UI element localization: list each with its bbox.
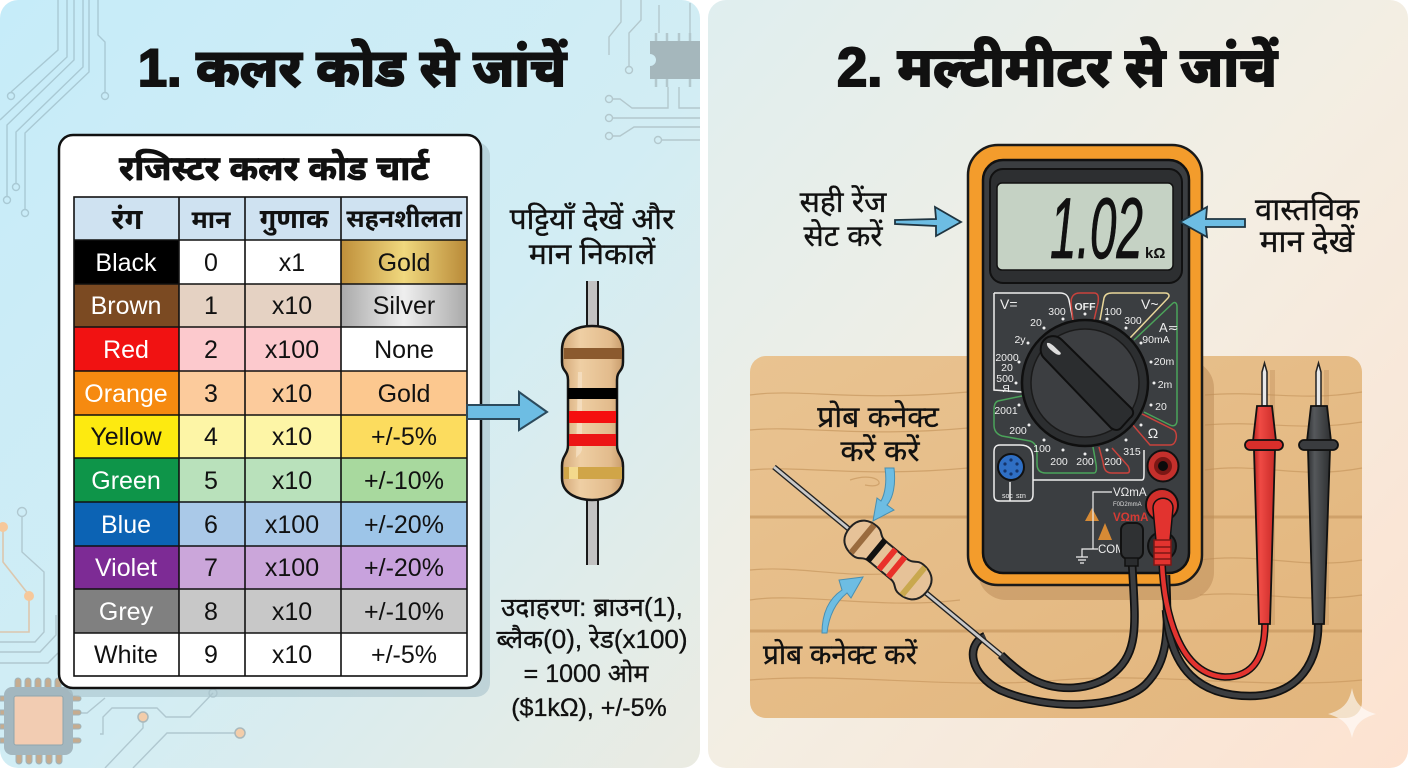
- dial labels: 2000: [995, 352, 1019, 364]
- probe lead: right black: [1166, 610, 1318, 696]
- table text: x100: [265, 336, 319, 364]
- table text: x100: [265, 554, 319, 582]
- dial labels: [994, 296, 1179, 556]
- chart heading: रजिस्टर कलर कोड चार्ट: [119, 148, 430, 188]
- rotary knob: [1022, 320, 1148, 446]
- dial labels: 100: [1104, 306, 1122, 318]
- table text: White: [94, 641, 158, 669]
- arrow: range: [895, 207, 961, 236]
- color code table: [74, 197, 467, 676]
- table text: 0: [204, 249, 218, 277]
- title: left: 1. कलर कोड से जांचें: [138, 38, 568, 98]
- dial labels: 2m: [1158, 379, 1173, 391]
- table text: Grey: [99, 598, 154, 626]
- panel: left background: [0, 0, 700, 768]
- red jack: [1146, 489, 1178, 521]
- table header: रंग: [112, 204, 143, 236]
- table header: सहनशीलता: [346, 204, 462, 233]
- title: right: 2. मल्टीमीटर से जांचें: [837, 37, 1278, 98]
- label: connect probe top: प्रोब कनेक्ट: [817, 399, 940, 434]
- dial labels: 20m: [1154, 356, 1174, 368]
- table text: x100: [265, 511, 319, 539]
- table header: गुणाक: [260, 204, 329, 235]
- label: connect probe bottom: प्रोब कनेक्ट करें: [763, 638, 918, 670]
- dial labels: soc: [1002, 493, 1013, 500]
- dial labels: sɪn: [1016, 493, 1026, 500]
- dial labels: 500: [996, 373, 1014, 385]
- table text: Black: [95, 249, 157, 277]
- input jack: red: [1148, 450, 1178, 482]
- table text: 9: [204, 641, 218, 669]
- table text: x1: [279, 249, 305, 277]
- table text: Violet: [95, 554, 157, 582]
- row fills: [74, 240, 467, 676]
- table text: x10: [272, 598, 312, 626]
- text: read the bands: मान निकालें: [529, 237, 656, 271]
- dial labels: V=: [1000, 296, 1018, 312]
- panel: wooden table: [750, 356, 1362, 718]
- probe lead: black from plug: [1001, 562, 1135, 688]
- table text: x10: [272, 380, 312, 408]
- blue transistor socket: [998, 454, 1024, 480]
- dial labels: 315: [1123, 446, 1141, 458]
- table text: +/-20%: [364, 511, 444, 539]
- table text: Red: [103, 336, 149, 364]
- dial labels: 2001: [994, 405, 1018, 417]
- icon: sparkle watermark: [1328, 688, 1376, 738]
- text: worked example: उदाहरण: ब्राउन(1),: [501, 592, 683, 622]
- icon: multimeter: [968, 145, 1202, 585]
- table grid: [74, 197, 467, 676]
- table text: 7: [204, 554, 218, 582]
- probe lead: black loop to resistor: [973, 575, 1167, 705]
- text: worked example: [496, 592, 688, 722]
- table text: x10: [272, 423, 312, 451]
- table text: 8: [204, 598, 218, 626]
- text: worked example: ब्लैक(0), रेड(x100): [496, 624, 688, 654]
- circuit decoration: top right chip and traces: [606, 0, 700, 144]
- table text: Green: [91, 467, 161, 495]
- dial labels: A≂: [1159, 320, 1179, 335]
- arrow: value: [1180, 207, 1245, 237]
- circuit decoration: top left traces: [0, 0, 108, 216]
- table text: 1: [204, 292, 218, 320]
- table text: +/-10%: [364, 467, 444, 495]
- shadow under multimeter: [978, 360, 1214, 600]
- arrow: probe bottom: [822, 577, 863, 633]
- table text: +/-5%: [371, 423, 437, 451]
- table text: Blue: [101, 511, 151, 539]
- dial labels: Ω: [1148, 425, 1158, 441]
- table text: 6: [204, 511, 218, 539]
- dial dots: [1014, 312, 1156, 456]
- table text: +/-5%: [371, 641, 437, 669]
- dial labels: 200: [1009, 425, 1027, 437]
- label: connect probe top: करें करें: [841, 434, 920, 468]
- dial labels: 20: [1001, 362, 1013, 374]
- table text: Gold: [378, 249, 430, 277]
- label: set the right range: [800, 185, 887, 253]
- icon: resistor on table: [774, 467, 1001, 655]
- label: see actual value: [1255, 192, 1360, 259]
- table text: 3: [204, 380, 218, 408]
- table text: Brown: [91, 292, 161, 320]
- table text: Yellow: [90, 423, 163, 451]
- table text: None: [374, 336, 434, 364]
- dial labels: COM: [1098, 544, 1125, 556]
- dial labels: 2y: [1014, 334, 1026, 346]
- table text: +/-20%: [364, 554, 444, 582]
- table text: Silver: [373, 292, 435, 320]
- text: read the bands: पट्टियाँ देखें और: [510, 201, 675, 237]
- panel: color code chart card: [59, 135, 490, 697]
- dial scale outlines: [994, 293, 1177, 501]
- table text: Orange: [84, 380, 168, 408]
- text: worked example: = 1000 ओम: [524, 659, 649, 688]
- label: see actual value: वास्तविक: [1255, 192, 1360, 227]
- test probe: red: [1245, 363, 1283, 625]
- display: 1.02: [1050, 181, 1143, 277]
- arrow: table to resistor: [467, 392, 547, 430]
- warning triangles: [1085, 508, 1112, 540]
- table text: 5: [204, 467, 218, 495]
- dial labels: 300: [1048, 306, 1066, 318]
- dial labels: VΩmA: [1113, 512, 1148, 524]
- table text: Gold: [378, 380, 430, 408]
- dial labels: 200: [1076, 456, 1094, 468]
- label: set the right range: सही रेंज: [800, 185, 887, 219]
- dial labels: 90mA: [1142, 334, 1170, 346]
- plug: red: [1153, 498, 1173, 565]
- text: worked example: ($1kΩ), +/-5%: [511, 694, 667, 722]
- dial labels: OFF: [1074, 301, 1096, 313]
- panel: right background: [708, 0, 1408, 768]
- display: [990, 169, 1182, 283]
- dial labels: 200: [1104, 456, 1122, 468]
- dial labels: 200: [1050, 456, 1068, 468]
- test probe: black: [1299, 363, 1338, 625]
- icon: large resistor: [562, 281, 623, 565]
- black jack: [1148, 532, 1176, 560]
- arrow: probe top: [873, 468, 895, 521]
- text: read the bands: [510, 201, 675, 271]
- dial labels: 300: [1124, 315, 1142, 327]
- dial labels: 20: [1030, 317, 1042, 329]
- table text: x10: [272, 641, 312, 669]
- table header: मान: [191, 206, 231, 234]
- circuit decoration: bottom left chip and traces: [0, 508, 245, 768]
- table text: x10: [272, 467, 312, 495]
- dial labels: F0D2mmA: [1113, 502, 1142, 508]
- plug: black: [1121, 523, 1143, 566]
- label: see actual value: मान देखें: [1260, 224, 1355, 259]
- display: kΩ: [1145, 245, 1165, 262]
- probe lead: red: [1162, 562, 1265, 677]
- table text: +/-10%: [364, 598, 444, 626]
- table text: 4: [204, 423, 218, 451]
- table header: [74, 197, 467, 240]
- dial labels: 20: [1155, 401, 1167, 413]
- label: connect probe top: [817, 399, 940, 468]
- label: set the right range: सेट करें: [803, 218, 883, 253]
- table text: 2: [204, 336, 218, 364]
- table text: [84, 249, 444, 669]
- dial labels: V~: [1141, 296, 1159, 312]
- table text: x10: [272, 292, 312, 320]
- dial labels: 100: [1033, 443, 1051, 455]
- COM wiring and ground symbol: [1076, 492, 1112, 563]
- dial labels: Я: [1002, 383, 1010, 395]
- dial labels: VΩmA: [1113, 487, 1147, 499]
